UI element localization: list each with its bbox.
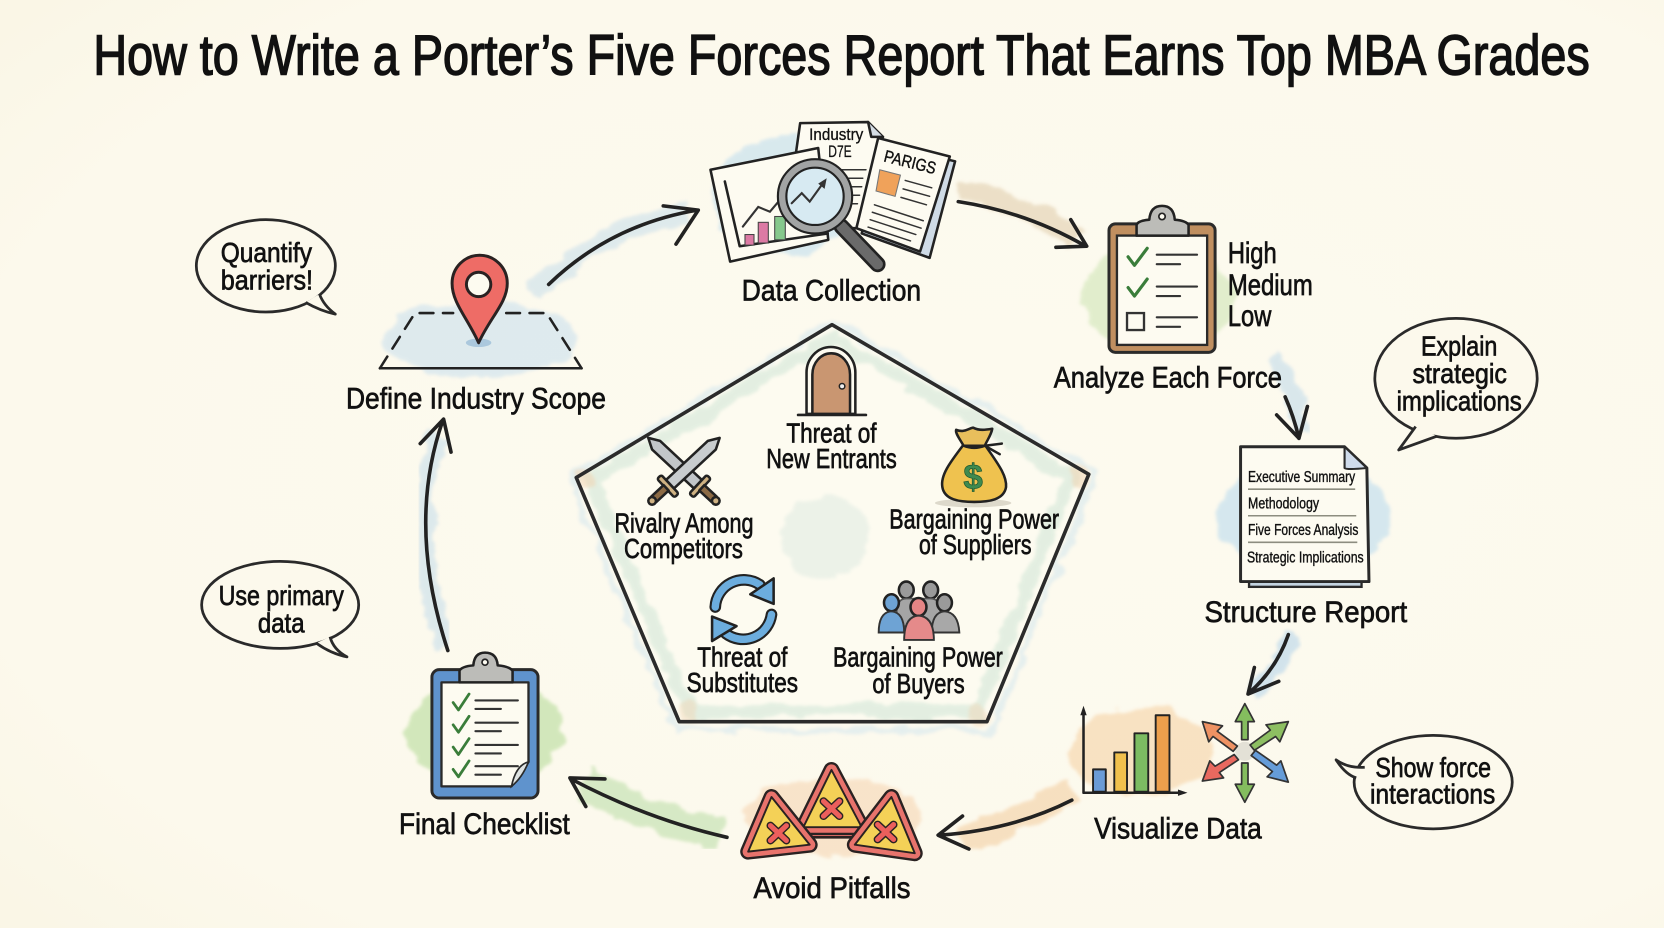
label: rating scale: High bbox=[1228, 237, 1277, 270]
callout: use primary data: Use primary bbox=[219, 580, 344, 611]
callout: show force interactions: Show force bbox=[1375, 752, 1491, 783]
label: rivalry among competitors: Rivalry Among bbox=[614, 508, 753, 539]
icon: door bbox=[798, 347, 866, 415]
label: threat of new entrants bbox=[766, 418, 897, 474]
label: threat of substitutes bbox=[687, 641, 798, 698]
step: avoid pitfalls bbox=[743, 770, 923, 905]
step: visualize data bbox=[1069, 704, 1288, 845]
icon: reports, chart and magnifier bbox=[710, 122, 955, 264]
callout: explain strategic implications: strategic bbox=[1412, 358, 1507, 389]
text: report contents: Methodology bbox=[1248, 495, 1319, 512]
label: bargaining power of buyers: Bargaining Power bbox=[833, 641, 1003, 672]
callout: show force interactions: interactions bbox=[1370, 778, 1495, 809]
callout: quantify barriers: Quantify bbox=[221, 237, 312, 268]
label: rivalry among competitors: Competitors bbox=[624, 533, 743, 564]
force: threat of new entrants bbox=[766, 347, 897, 474]
force: threat of substitutes bbox=[687, 578, 798, 698]
label: rating scale bbox=[1228, 237, 1313, 333]
force: rivalry among competitors bbox=[614, 429, 753, 564]
arrow: structure to visualize bbox=[1248, 635, 1290, 695]
step: data collection bbox=[710, 122, 955, 307]
callout: show force interactions bbox=[1336, 735, 1512, 829]
arrow: visualize to pitfalls bbox=[938, 791, 1072, 849]
arrow: analyze to structure bbox=[1272, 356, 1307, 438]
text: industry data page: D7E bbox=[828, 142, 852, 161]
icon: brown clipboard bbox=[1082, 206, 1235, 352]
label: rivalry among competitors bbox=[614, 508, 753, 564]
force: bargaining power of buyers bbox=[833, 582, 1003, 699]
arrow: final checklist to define scope bbox=[420, 419, 451, 651]
label: threat of new entrants: Threat of bbox=[786, 418, 877, 449]
label: threat of substitutes: Threat of bbox=[697, 641, 788, 672]
callout: quantify barriers: barriers! bbox=[221, 265, 313, 296]
label: bargaining power of suppliers: Bargaining Power bbox=[889, 503, 1059, 534]
label: data collection: Data Collection bbox=[742, 274, 921, 307]
icon: warning triangles bbox=[743, 770, 923, 855]
label: rating scale: Low bbox=[1228, 300, 1272, 333]
text: report contents: Strategic Implications bbox=[1247, 549, 1364, 566]
icon: blue clipboard bbox=[406, 653, 564, 798]
label: bargaining power of buyers: of Buyers bbox=[872, 668, 965, 699]
icon: bar chart bbox=[1069, 706, 1213, 796]
icon: report document bbox=[1217, 447, 1391, 587]
callout: explain strategic implications bbox=[1375, 318, 1537, 450]
label: rating scale: Medium bbox=[1228, 269, 1313, 302]
icon: crossed swords bbox=[640, 429, 728, 513]
label: avoid pitfalls: Avoid Pitfalls bbox=[753, 872, 911, 905]
label: visualize data: Visualize Data bbox=[1094, 812, 1262, 845]
step: final checklist bbox=[399, 653, 571, 841]
text: report contents bbox=[1247, 469, 1364, 566]
icon: cycle arrows bbox=[712, 578, 774, 641]
label: threat of new entrants: New Entrants bbox=[766, 443, 897, 474]
text: report contents: Executive Summary bbox=[1248, 469, 1355, 486]
text: industry data page: Industry bbox=[809, 125, 864, 144]
step: analyze each force bbox=[1054, 206, 1313, 394]
callout: use primary data: data bbox=[258, 607, 305, 638]
icon: money bag: $ bbox=[963, 458, 983, 497]
arrow: data collection to analyze bbox=[958, 191, 1087, 247]
arrow: pitfalls to final checklist bbox=[570, 778, 727, 837]
text: newspaper heading: PARIGS bbox=[882, 147, 938, 178]
label: final checklist: Final Checklist bbox=[399, 808, 571, 841]
label: structure report: Structure Report bbox=[1204, 596, 1408, 629]
callout: quantify barriers bbox=[196, 220, 335, 314]
step: define industry scope bbox=[346, 255, 606, 416]
callout: explain strategic implications: Explain bbox=[1421, 331, 1497, 362]
label: bargaining power of suppliers: of Suppliers bbox=[919, 529, 1032, 560]
panel: five forces pentagon bbox=[571, 320, 1095, 730]
callout: use primary data bbox=[202, 561, 359, 657]
label: bargaining power of buyers bbox=[833, 641, 1003, 699]
label: analyze each force: Analyze Each Force bbox=[1054, 361, 1282, 394]
icon: force interaction arrows bbox=[1202, 704, 1288, 802]
callout: explain strategic implications: implications bbox=[1397, 386, 1522, 417]
arrow: define scope to data collection bbox=[536, 206, 698, 292]
text: industry data page bbox=[809, 125, 864, 161]
force: bargaining power of suppliers bbox=[889, 428, 1059, 560]
label: define industry scope: Define Industry Scope bbox=[346, 383, 606, 416]
step: structure report bbox=[1204, 447, 1408, 629]
icon: group of people bbox=[879, 582, 959, 640]
icon: money bag bbox=[935, 428, 1011, 507]
text: report contents: Five Forces Analysis bbox=[1248, 522, 1359, 539]
label: threat of substitutes: Substitutes bbox=[687, 667, 798, 698]
label: bargaining power of suppliers bbox=[889, 503, 1059, 560]
icon: map pin on dashed area bbox=[380, 255, 582, 378]
